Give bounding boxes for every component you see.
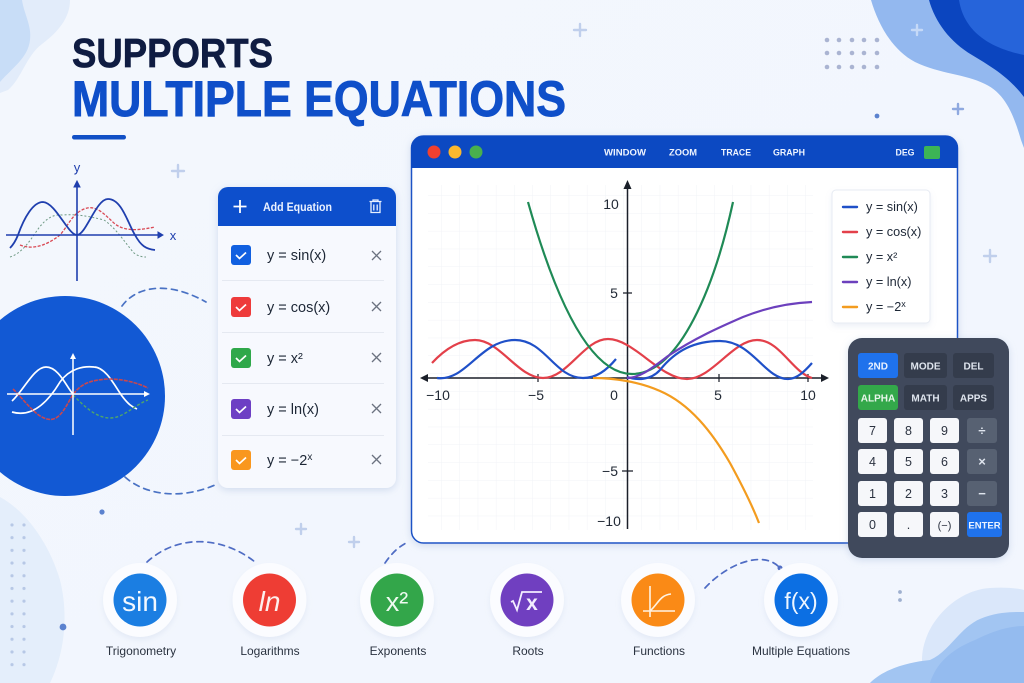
calculator number keys: 5 bbox=[905, 455, 912, 469]
category: trigonometry bbox=[103, 563, 177, 658]
title bar: WINDOW bbox=[604, 148, 647, 158]
calculator function keys: 2ND bbox=[868, 362, 888, 372]
calculator number keys: 8 bbox=[905, 424, 912, 438]
category: multiple equations: Multiple Equations bbox=[752, 644, 850, 658]
dot pattern: bottom left bbox=[10, 523, 34, 675]
calculator function keys: MATH bbox=[911, 394, 940, 404]
axis numbers: 5 bbox=[610, 285, 618, 301]
axis numbers: 0 bbox=[610, 387, 618, 403]
category: logarithms: Logarithms bbox=[240, 644, 300, 658]
decorative blob: top right light bbox=[871, 0, 1024, 148]
title bar bbox=[411, 136, 958, 168]
title line 1: SUPPORTS bbox=[72, 30, 273, 76]
calculator function keys bbox=[858, 353, 994, 410]
axis numbers: −10 bbox=[426, 387, 450, 403]
axis numbers: −10 bbox=[597, 513, 621, 529]
chart legend bbox=[832, 190, 930, 323]
axis numbers: 5 bbox=[714, 387, 722, 403]
category: functions: Functions bbox=[633, 644, 685, 658]
calculator function keys: DEL bbox=[964, 362, 984, 372]
connector end dot bbox=[778, 566, 790, 576]
title underline bbox=[72, 135, 126, 140]
title bar: ZOOM bbox=[669, 148, 697, 158]
row: sin: y = sin(x) bbox=[267, 248, 326, 264]
small graph: top left bbox=[6, 160, 177, 281]
calculator number keys bbox=[858, 418, 959, 537]
decorative blob: top right inner bbox=[959, 0, 1024, 55]
small graph: top left: y bbox=[74, 160, 81, 175]
curve: ln bbox=[627, 302, 812, 378]
decorative blob: bottom right inner bbox=[930, 626, 1024, 683]
small graph: top left: x bbox=[170, 228, 177, 243]
decorative blob: bottom left bbox=[0, 497, 65, 683]
calculator operator keys: ENTER bbox=[968, 520, 1001, 532]
category: logarithms bbox=[232, 563, 306, 658]
calculator number keys: 4 bbox=[869, 455, 876, 469]
calculator number keys: 6 bbox=[941, 455, 948, 469]
calculator operator keys: − bbox=[978, 486, 986, 501]
calculator operator keys: ÷ bbox=[978, 423, 986, 438]
row: cos bbox=[231, 297, 381, 317]
chart legend: y = ln(x) bbox=[866, 275, 911, 289]
category: exponents: x² bbox=[386, 587, 408, 617]
row: negative two power x: y = −2 bbox=[267, 453, 307, 469]
row: negative two power x: x bbox=[307, 452, 312, 463]
calculator number keys: 2 bbox=[905, 487, 912, 501]
title bar: TRACE bbox=[721, 148, 751, 158]
calculator number keys: 3 bbox=[941, 487, 948, 501]
panel: calculator bbox=[848, 338, 1009, 558]
category: exponents bbox=[360, 563, 434, 658]
axis numbers: 10 bbox=[603, 196, 619, 212]
panel header: Add Equation bbox=[263, 202, 332, 214]
dot pattern: top right bbox=[825, 38, 879, 69]
calculator function keys: APPS bbox=[960, 394, 987, 404]
category: functions bbox=[621, 563, 695, 658]
chart legend: y = x² bbox=[866, 250, 897, 264]
calculator number keys: 1 bbox=[869, 487, 876, 501]
row: cos: y = cos(x) bbox=[267, 300, 330, 316]
calculator operator keys: × bbox=[978, 454, 986, 469]
category: exponents: Exponents bbox=[370, 644, 426, 658]
curve: sin bbox=[437, 340, 812, 379]
row: sin bbox=[231, 245, 381, 265]
row: x squared: y = x² bbox=[267, 351, 303, 367]
decorative dots bbox=[60, 114, 902, 630]
category: roots: x bbox=[526, 592, 538, 615]
chart legend: y = cos(x) bbox=[866, 225, 921, 239]
axis numbers bbox=[426, 196, 816, 529]
calculator function keys: ALPHA bbox=[861, 394, 895, 404]
panel header bbox=[218, 187, 396, 226]
chart legend: y = −2 bbox=[866, 300, 901, 314]
chart legend: y = sin(x) bbox=[866, 200, 918, 214]
curve: x squared bbox=[528, 202, 733, 374]
category: logarithms: ln bbox=[259, 586, 280, 617]
blue circle with graph bbox=[0, 296, 165, 496]
curve: negative two power x bbox=[593, 378, 759, 523]
decorative blob: top left inner bbox=[0, 0, 30, 82]
calculator number keys: (−) bbox=[938, 520, 951, 532]
panel: equation list bbox=[218, 187, 396, 488]
category: roots: Roots bbox=[512, 644, 544, 658]
icon: plus bbox=[234, 200, 246, 213]
decorative blob: top left outer bbox=[0, 0, 70, 93]
category: roots bbox=[490, 563, 564, 658]
category: trigonometry: Trigonometry bbox=[106, 644, 176, 658]
dashed connector arcs: left bbox=[122, 288, 215, 494]
row: negative two power x bbox=[231, 450, 381, 470]
axis numbers: −5 bbox=[602, 463, 618, 479]
icon: trash bbox=[370, 200, 382, 212]
panel: graph window bbox=[411, 136, 958, 543]
decorative plus signs bbox=[172, 24, 996, 547]
title bbox=[72, 30, 566, 140]
curve: cos bbox=[432, 339, 812, 379]
dashed connector arcs: bottom bbox=[147, 542, 778, 588]
calculator number keys: 0 bbox=[869, 518, 876, 532]
calculator number keys: 7 bbox=[869, 424, 876, 438]
chart grid bbox=[428, 185, 813, 530]
decorative blob: top right dark bbox=[929, 0, 1024, 97]
title line 2: MULTIPLE EQUATIONS bbox=[72, 71, 566, 127]
row dividers bbox=[222, 280, 384, 436]
calculator number keys: . bbox=[907, 518, 910, 532]
calculator function keys: MODE bbox=[910, 362, 941, 372]
category: multiple equations bbox=[752, 563, 850, 658]
chart legend: x bbox=[901, 299, 906, 309]
row: ln: y = ln(x) bbox=[267, 402, 319, 418]
calculator operator keys bbox=[967, 418, 1002, 537]
decorative blob: bottom right light bbox=[922, 588, 1024, 683]
row: x squared bbox=[231, 348, 381, 368]
title bar: GRAPH bbox=[773, 148, 805, 158]
row: ln bbox=[231, 399, 381, 419]
category: trigonometry: sin bbox=[122, 586, 158, 617]
axis numbers: −5 bbox=[528, 387, 544, 403]
category: multiple equations: f(x) bbox=[784, 588, 818, 614]
decorative blob: bottom right medium bbox=[870, 612, 1024, 683]
calculator number keys: 9 bbox=[941, 424, 948, 438]
chart axes bbox=[420, 180, 829, 529]
title bar: DEG bbox=[896, 148, 914, 158]
axis numbers: 10 bbox=[800, 387, 816, 403]
